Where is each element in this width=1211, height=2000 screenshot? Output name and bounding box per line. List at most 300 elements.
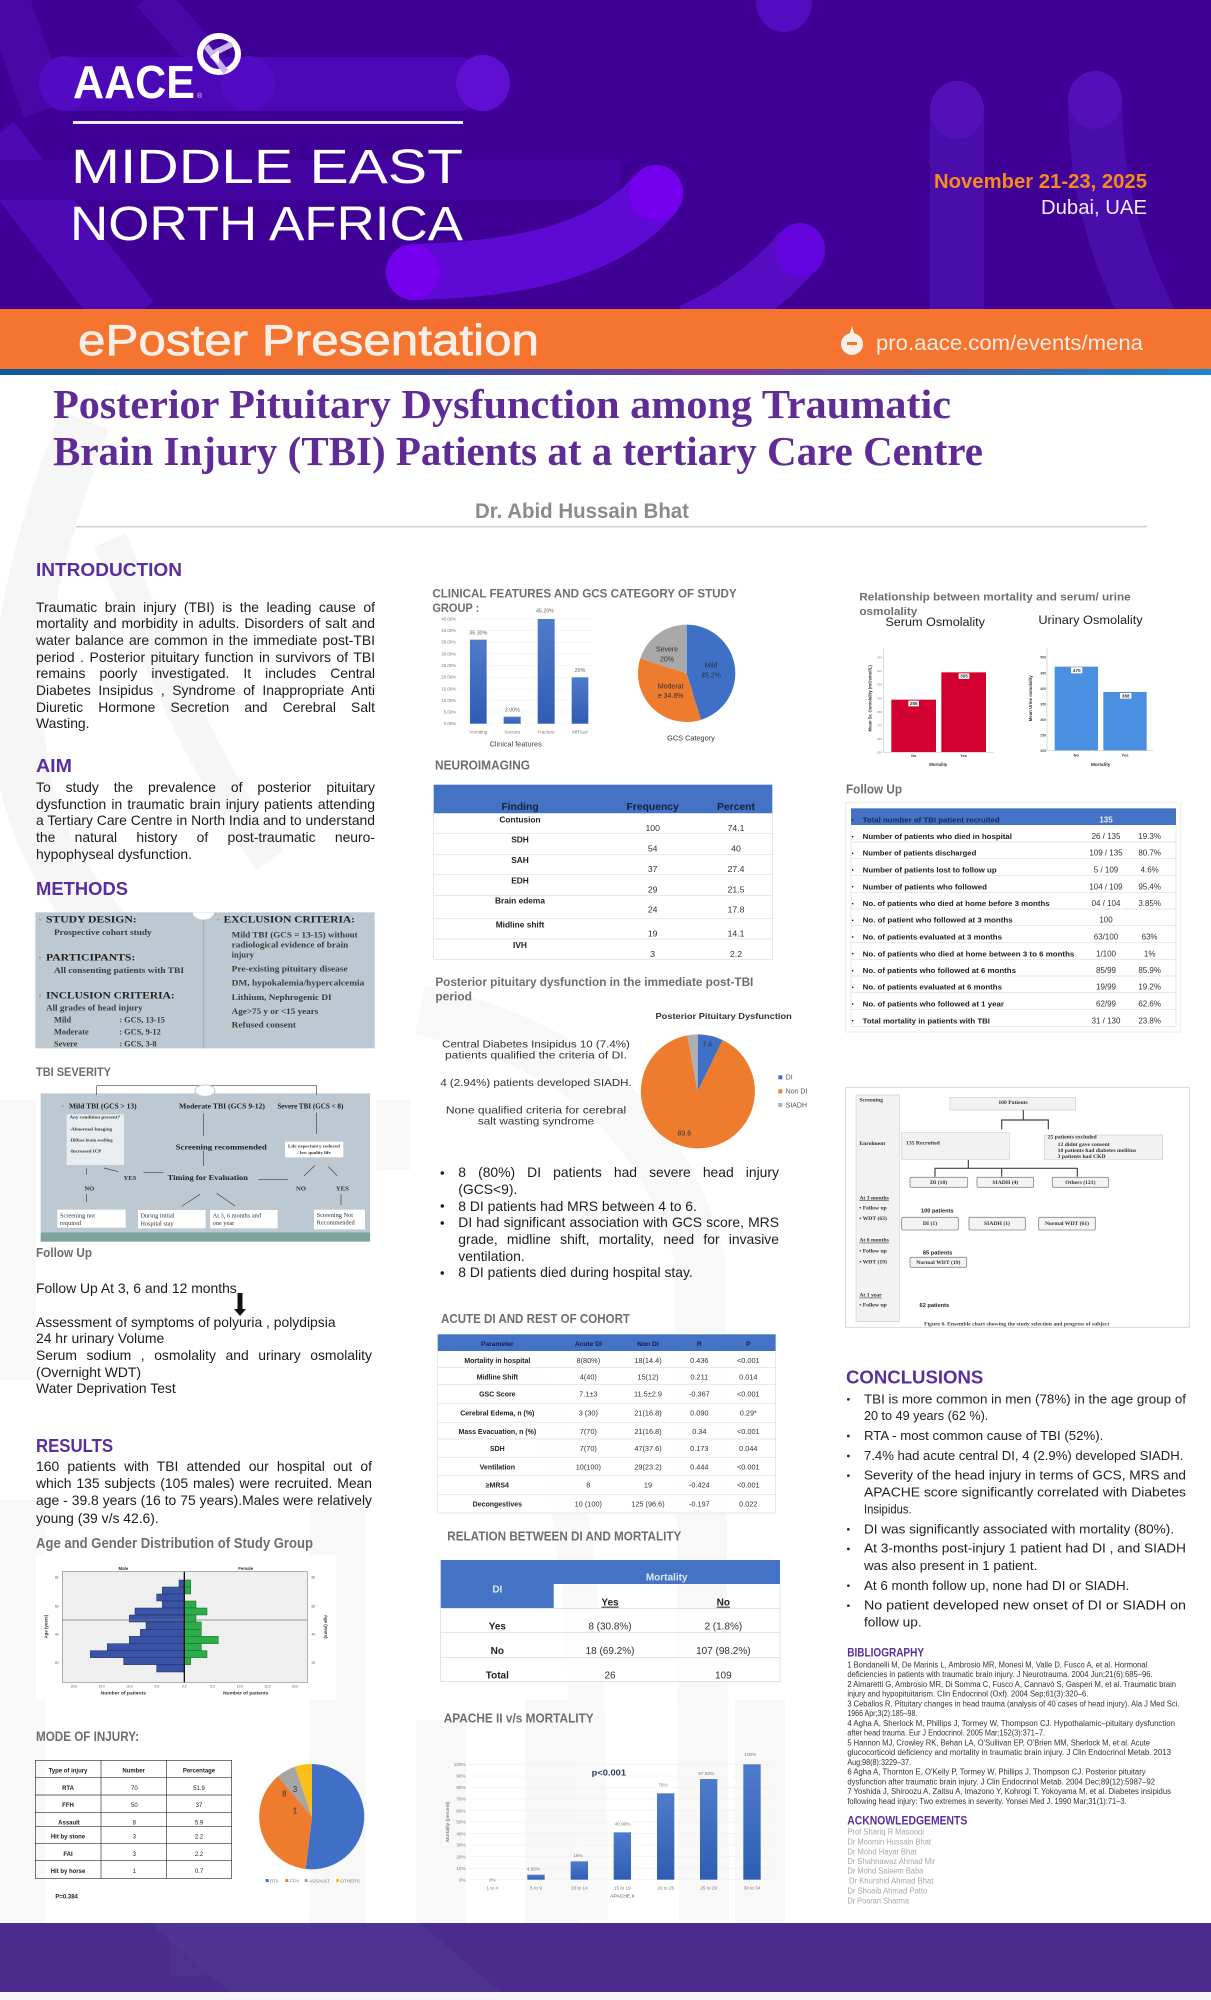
- flowchart: study selection and progress: Screening: [859, 1098, 883, 1104]
- chart: posterior pituitary dysfunction pie: DI: [786, 1075, 793, 1082]
- chart: clinical features bars: 10.00%: [441, 698, 456, 703]
- chart: serum osmolality: Mean Sr. Osmolality (mOsmol/L): [867, 665, 872, 732]
- table: relation between DI and mortality: 107 (98.2%): [696, 1646, 751, 1657]
- list: conclusions: At 3-months post-injury 1 patient had DI , and SIADH: [864, 1541, 1186, 1556]
- event name: [70, 141, 463, 251]
- table: relation between DI and mortality: Yes: [601, 1598, 619, 1609]
- list: bibliography: 7 Yoshida J, Shiroozu A, Zaitsu A, Imazono Y, Kohrogi T, Yokoyama M, et al. Diabetes insipidus: [847, 1787, 1171, 1796]
- flowchart: TBI severity screening: Severe TBI (GCS < 8): [277, 1101, 344, 1110]
- list: bibliography: dysfunction after traumatic brain injury. J Clin Endocrinol Metab. 2004 Dec;89(12):5987–92: [847, 1777, 1156, 1786]
- table: relation between DI and mortality: 2 (1.8%): [704, 1621, 742, 1632]
- table: relation between DI and mortality: Total: [486, 1671, 509, 1682]
- table: mode of injury: FFH: [62, 1803, 74, 1809]
- table: acute DI and rest of cohort: 15(12): [637, 1373, 659, 1382]
- chart: mode of injury pie: 1: [293, 1807, 298, 1816]
- table: acute DI and rest of cohort: 47(37.6): [634, 1444, 662, 1453]
- flowchart: study selection and progress: 85 patients: [923, 1251, 952, 1257]
- table: relation between DI and mortality: 8 (30.8%): [588, 1621, 632, 1632]
- list: acknowledgements: Dr Shahnawaz Ahmad Mir: [847, 1857, 936, 1866]
- text block: aim: hypophyseal dysfunction.: [36, 846, 192, 862]
- chart: GCS category pie: e 34.8%: [658, 693, 683, 700]
- table: follow up: 63/100: [1094, 933, 1119, 942]
- chart: mode of injury pie: 8: [282, 1789, 287, 1798]
- chart: posterior pituitary dysfunction pie: [641, 1011, 807, 1148]
- list: conclusions: At 6 month follow up, none had DI or SIADH.: [864, 1578, 1129, 1593]
- chart: APACHE II mortality bars: 15 to 19: [614, 1885, 631, 1890]
- table: acute DI and rest of cohort: 10(100): [576, 1462, 601, 1471]
- table: mode of injury: Assault: [58, 1820, 80, 1826]
- chart: GCS category pie: Mild: [705, 663, 718, 670]
- table: acute DI and rest of cohort: 19: [644, 1481, 652, 1490]
- chart: urinary osmolality: Yes: [1122, 752, 1129, 757]
- flowchart: study selection and progress: At 6 months: [859, 1238, 890, 1244]
- table: mode of injury: RTA: [62, 1786, 75, 1792]
- list: acknowledgements: Dr Moomin Hussain Bhat: [847, 1837, 932, 1846]
- flowchart: study selection and progress: 25 patients excluded: [1048, 1135, 1098, 1141]
- table: neuroimaging: Midline shift: [496, 920, 545, 930]
- text block: introduction: water balance are common in the immediate post-TBI: [36, 632, 375, 648]
- table: acute DI and rest of cohort: Midline Shift: [477, 1375, 519, 1382]
- chart: urinary osmolality: 450: [1040, 671, 1046, 675]
- chart: urinary osmolality: No: [1074, 752, 1080, 757]
- table: acute DI and rest of cohort: 8(80%): [577, 1356, 600, 1365]
- table: mode of injury: FAI: [63, 1852, 73, 1858]
- chart: GCS category pie: [638, 625, 735, 742]
- table: neuroimaging: Frequency: [627, 802, 679, 813]
- chart: APACHE II mortality bars: 4.50%: [527, 1867, 540, 1872]
- table: acute DI and rest of cohort: Mortality in hospital: [464, 1358, 530, 1365]
- chart: APACHE II mortality bars: [445, 1752, 773, 1900]
- heading: posterior pituitary dysfunction: Posterior pituitary dysfunction in the immediate post-TBI: [435, 976, 753, 989]
- panel: study design and criteria: [35, 912, 375, 1049]
- chart: clinical features bars: 36.30%: [469, 631, 488, 637]
- event date and place: Dubai, UAE: [1041, 197, 1147, 219]
- table: acute DI and rest of cohort: 11.5±2.9: [634, 1390, 662, 1399]
- flowchart: study selection and progress: [846, 1087, 1189, 1327]
- flowchart: study selection and progress: Normal WDT (19): [916, 1259, 960, 1266]
- table: acute DI and rest of cohort: <0.001: [737, 1356, 760, 1365]
- chart: APACHE II mortality bars: 60%: [456, 1808, 466, 1813]
- table: acute DI and rest of cohort: 0.022: [739, 1499, 758, 1508]
- heading: clinical features: CLINICAL FEATURES AND GCS CATEGORY OF STUDY: [432, 586, 737, 600]
- table: relation between DI and mortality: 18 (69.2%): [586, 1646, 634, 1657]
- flowchart: study selection and progress: Figure 6. Ensemble chart showing the study selection and progress of subject: [924, 1321, 1109, 1327]
- list: conclusions: [847, 1391, 1186, 1630]
- table: neuroimaging: 14.1: [728, 929, 745, 939]
- table: neuroimaging: 17.8: [728, 905, 745, 915]
- text block: results: which 135 subjects (105 males) were recruited. Mean: [36, 1475, 372, 1491]
- heading: relationship mortality and osmolality: Relationship between mortality and serum/ urine: [859, 592, 1131, 604]
- list: acknowledgements: Dr Mohd Hayat Bhat: [847, 1847, 917, 1856]
- heading: conclusions: CONCLUSIONS: [846, 1366, 983, 1387]
- chart: mode of injury pie: RTA: [270, 1878, 280, 1883]
- table: acute DI and rest of cohort: <0.001: [737, 1462, 760, 1471]
- table: follow up: 04 / 104: [1092, 899, 1121, 908]
- table: mode of injury: 8: [133, 1820, 137, 1826]
- chart: serum osmolality: 310: [877, 669, 882, 673]
- chart: age and gender pyramid: Male: [119, 1566, 129, 1571]
- table: acute DI and rest of cohort: 0.444: [690, 1462, 709, 1471]
- text block: dysfunction findings: 8 (80%) DI patients had severe head injury: [458, 1164, 779, 1180]
- heading: relation between DI and mortality: RELATION BETWEEN DI AND MORTALITY: [447, 1530, 682, 1544]
- table: neuroimaging: 37: [648, 864, 658, 874]
- title: [53, 381, 983, 474]
- table: follow up: No. of patients who died at home between 3 to 6 months: [863, 949, 1074, 958]
- list: conclusions: 20 to 49 years (62 %).: [864, 1408, 988, 1423]
- chart: clinical features bars: 45.00%: [441, 616, 456, 621]
- table: follow up: 95.4%: [1138, 882, 1161, 891]
- chart: APACHE II mortality bars: 30 to 34: [744, 1885, 761, 1890]
- text block: results: 160 patients with TBI attended our hospital out of: [36, 1458, 372, 1474]
- table: neuroimaging: 40: [731, 844, 741, 854]
- title: Posterior Pituitary Dysfunction among Traumatic: [53, 381, 951, 427]
- text block: dysfunction findings: DI had significant association with GCS score, MRS: [458, 1214, 779, 1230]
- text block: follow up schedule: Serum sodium , osmolality and urinary osmolality: [36, 1347, 372, 1363]
- table: neuroimaging: 24: [648, 905, 658, 915]
- chart: posterior pituitary dysfunction pie: Non DI: [786, 1089, 807, 1096]
- list: bibliography: after head trauma. Eur J Endocrinol. 2005 Mar;152(3):371–7.: [847, 1729, 1045, 1738]
- flowchart: TBI severity screening: At 3, 6 months and: [213, 1212, 262, 1219]
- table: mode of injury: Percentage: [183, 1769, 216, 1775]
- table: acute DI and rest of cohort: 0.044: [739, 1444, 758, 1453]
- flowchart: TBI severity screening: YES: [336, 1185, 349, 1192]
- flowchart: TBI severity screening: NO: [296, 1185, 306, 1192]
- chart: GCS category pie: 20%: [660, 656, 674, 663]
- event date and place: [934, 171, 1147, 219]
- table: acute DI and rest of cohort: 0.436: [690, 1356, 709, 1365]
- table: relation between DI and mortality: [441, 1560, 780, 1682]
- flowchart: TBI severity screening: Moderate TBI (GCS 9-12): [179, 1101, 266, 1110]
- chart: age and gender pyramid: Number of patients: [223, 1691, 269, 1697]
- flowchart: TBI severity screening: / low quality life: [296, 1151, 331, 1155]
- heading: results: RESULTS: [36, 1435, 113, 1456]
- table: mode of injury: 50: [131, 1803, 138, 1809]
- table: follow up: 100: [1099, 916, 1113, 925]
- table: relation between DI and mortality: Mortality: [646, 1573, 688, 1584]
- table: acute DI and rest of cohort: SDH: [490, 1446, 505, 1453]
- chart: age and gender pyramid: 20.0: [71, 1684, 77, 1688]
- panel: study design and criteria: Age>75 y or <15 years: [232, 1007, 319, 1016]
- text: dysfunction summary: None qualified criteria for cerebral: [446, 1106, 626, 1117]
- text block: follow up schedule: Follow Up At 3, 6 and 12 months: [36, 1280, 237, 1296]
- text: dysfunction summary: Central Diabetes Insipidus 10 (7.4%): [442, 1039, 630, 1050]
- chart: mode of injury pie: 3: [293, 1785, 298, 1794]
- chart: APACHE II mortality bars: 90%: [456, 1774, 466, 1779]
- list: bibliography: deficiencies in patients with traumatic brain injury. J Neurotrauma. 2004 Jun;21(6):685–96.: [847, 1670, 1153, 1679]
- table: acute DI and rest of cohort: 0.090: [690, 1408, 709, 1417]
- chart: APACHE II mortality bars: 50%: [456, 1820, 466, 1825]
- table: acute DI and rest of cohort: <0.001: [737, 1481, 760, 1490]
- flowchart: study selection and progress: SIADH (1): [984, 1220, 1010, 1227]
- list: acknowledgements: Dr Pooran Sharma: [847, 1896, 910, 1905]
- panel: study design and criteria: Refused consent: [232, 1021, 296, 1030]
- table: mode of injury: P=0.384: [55, 1894, 79, 1900]
- heading: acknowledgements: ACKNOWLEDGEMENTS: [847, 1815, 968, 1827]
- chart: mode of injury pie: FFH: [290, 1878, 299, 1883]
- heading: clinical features: [432, 586, 737, 615]
- event name: MIDDLE EAST: [71, 141, 463, 194]
- chart: APACHE II mortality bars: 10%: [456, 1866, 466, 1871]
- table: neuroimaging: Percent: [717, 802, 756, 813]
- flowchart: study selection and progress: • Follow up: [859, 1303, 887, 1309]
- text block: results: [36, 1458, 372, 1526]
- chart: mode of injury pie: OTHERS: [340, 1878, 360, 1883]
- table: mode of injury: 70: [131, 1786, 138, 1792]
- flowchart: study selection and progress: Normal WDT (61): [1045, 1220, 1089, 1227]
- table: acute DI and rest of cohort: Parameter: [481, 1341, 514, 1348]
- table: follow up: 31 / 130: [1092, 1016, 1121, 1025]
- table: mode of injury: 5.9: [195, 1820, 204, 1826]
- chart: clinical features bars: 20.00%: [441, 675, 456, 680]
- chart: serum osmolality: [867, 615, 993, 767]
- panel: study design and criteria: Mild: [54, 1016, 71, 1025]
- heading: clinical features: GROUP :: [432, 601, 479, 615]
- chart: serum osmolality: 305: [960, 674, 968, 679]
- chart: APACHE II mortality bars: APACHE II: [610, 1894, 634, 1900]
- chart: urinary osmolality: 300: [1040, 718, 1046, 722]
- table: neuroimaging: EDH: [511, 875, 529, 885]
- flowchart: study selection and progress: 12 didnt gave consent: [1058, 1142, 1110, 1148]
- table: acute DI and rest of cohort: 125 (96.6): [631, 1499, 665, 1508]
- table: follow up: 63%: [1142, 933, 1158, 942]
- table: mode of injury: Number: [122, 1769, 146, 1775]
- chart: APACHE II mortality bars: 1 to 4: [487, 1885, 499, 1890]
- bullets: dysfunction findings markers: [440, 1171, 444, 1275]
- list: bibliography: 5 Hannon MJ, Crowley RK, Behan LA, O'Sullivan EP, O'Brien MM, Sherlock M, et al. Acute: [847, 1738, 1151, 1747]
- chart: APACHE II mortality bars: 25 to 29: [700, 1885, 717, 1890]
- chart: clinical features bars: 20%: [575, 668, 586, 674]
- list: conclusions: No patient developed new onset of DI or SIADH on: [864, 1597, 1186, 1612]
- chart: serum osmolality: 290: [877, 696, 882, 700]
- chart: urinary osmolality: 350: [1040, 702, 1046, 706]
- table: mode of injury: Hit by stone: [51, 1835, 86, 1841]
- heading: aim: AIM: [36, 755, 72, 776]
- chart: clinical features bars: MRS≥4: [572, 729, 588, 734]
- chart: serum osmolality: Mortality: [929, 762, 948, 767]
- table: follow up: 26 / 135: [1092, 832, 1121, 841]
- heading: relationship mortality and osmolality: [859, 592, 1131, 618]
- chart: serum osmolality: 300: [877, 683, 882, 687]
- divider rule in logo block: [73, 121, 463, 124]
- table: follow up: 62/99: [1096, 1000, 1117, 1009]
- text: dysfunction summary: patients qualified the criteria of DI.: [445, 1050, 627, 1061]
- table: neuroimaging: Finding: [501, 802, 539, 813]
- table: follow up: Number of patients lost to follow up: [863, 866, 997, 875]
- panel: study design and criteria: STUDY DESIGN:: [46, 914, 137, 924]
- flowchart: TBI severity screening: Screening not: [60, 1212, 95, 1219]
- flowchart: study selection and progress: • Follow up: [859, 1249, 887, 1255]
- chart: serum osmolality: 320: [877, 655, 882, 659]
- panel: study design and criteria: : GCS, 9-12: [119, 1028, 161, 1037]
- chart: urinary osmolality: 500: [1040, 656, 1046, 660]
- table: neuroimaging: 29: [648, 884, 658, 894]
- table: acute DI and rest of cohort: 29(23.2): [634, 1462, 662, 1471]
- flowchart: study selection and progress: DI (1): [923, 1220, 937, 1227]
- text block: introduction: period . Posterior pituitary function in survivors of TBI: [36, 649, 375, 665]
- text block: dysfunction findings: 8 DI patients had MRS between 4 to 6.: [458, 1198, 697, 1214]
- table: acute DI and rest of cohort: ≥MRS4: [486, 1483, 509, 1490]
- flowchart: study selection and progress: • WDT (19): [859, 1258, 887, 1265]
- table: neuroimaging: 100: [645, 823, 660, 833]
- flowchart: TBI severity screening: Screening Not: [317, 1212, 353, 1219]
- flowchart: TBI severity screening: During initial: [140, 1213, 175, 1220]
- table: acute DI and rest of cohort: Acute DI: [575, 1341, 602, 1348]
- table: acute DI and rest of cohort: 0.29*: [740, 1408, 757, 1417]
- table: follow up: 1%: [1144, 949, 1155, 958]
- chart: age and gender pyramid: Number of patients: [101, 1691, 146, 1697]
- author: Dr. Abid Hussain Bhat: [475, 500, 689, 523]
- table: follow up: [846, 803, 1181, 1032]
- table: acute DI and rest of cohort: 3 (30): [579, 1408, 598, 1417]
- text block: results: age - 39.8 years (16 to 75 years).Males were relatively: [36, 1492, 372, 1508]
- list: bibliography: 1966 Apr;3(2):185–98.: [847, 1709, 917, 1718]
- chart: serum osmolality: 250: [877, 751, 882, 755]
- table: mode of injury: 0.7: [195, 1869, 204, 1875]
- table: acute DI and rest of cohort: 10 (100): [575, 1499, 602, 1508]
- list: conclusions: DI was significantly associated with mortality (80%).: [864, 1521, 1174, 1536]
- heading: neuroimaging: NEUROIMAGING: [435, 758, 530, 772]
- heading: follow up (methods): Follow Up: [36, 1245, 92, 1260]
- flowchart: TBI severity screening: Timing for Evaluation: [168, 1173, 248, 1182]
- chart: clinical features bars: 15.00%: [441, 686, 456, 691]
- table: neuroimaging: Contusion: [499, 814, 541, 824]
- chart: clinical features bars: 40.00%: [441, 628, 456, 633]
- flowchart: TBI severity screening: NO: [84, 1185, 94, 1192]
- table: mode of injury: 3: [133, 1835, 137, 1841]
- chart: serum osmolality: 280: [877, 710, 882, 714]
- chart: urinary osmolality: Mean Urine osmolality: [1028, 675, 1033, 721]
- chart: age and gender pyramid: 40: [311, 1633, 315, 1637]
- table: follow up: Number of patients who followed: [863, 882, 987, 891]
- chart: clinical features bars: Vomiting: [469, 729, 488, 734]
- chart: APACHE II mortality bars: 40.90%: [615, 1822, 631, 1827]
- heading: relationship mortality and osmolality: osmolality: [859, 606, 918, 618]
- table: relation between DI and mortality: No: [491, 1646, 504, 1657]
- chart: age and gender pyramid: Female: [238, 1566, 254, 1571]
- text block: follow up schedule: Assessment of symptoms of polyuria , polydipsia: [36, 1314, 336, 1330]
- list: acknowledgements: Dr Shoaib Ahmad Patto: [847, 1886, 928, 1895]
- table: follow up: 5 / 109: [1094, 866, 1119, 875]
- chart: posterior pituitary dysfunction pie: SIADH: [786, 1102, 807, 1109]
- chart: clinical features bars: [441, 608, 593, 748]
- table: follow up: Number of patients discharged: [863, 849, 977, 858]
- heading: methods: METHODS: [36, 878, 128, 899]
- list: conclusions: APACHE score significantly correlated with Diabetes: [864, 1485, 1186, 1500]
- chart: clinical features bars: Clinical features: [490, 739, 542, 748]
- text block: dysfunction findings: (GCS<9).: [458, 1181, 517, 1197]
- list: conclusions: was also present in 1 patient.: [863, 1558, 1037, 1573]
- chart: age and gender pyramid: 5.0: [155, 1684, 159, 1688]
- flowchart: study selection and progress: 160 Patients: [998, 1100, 1029, 1106]
- list: bibliography: glucocorticoid deficiency and mortality in traumatic brain injury. J Clin Endocrinol Metab. 2013: [847, 1748, 1172, 1757]
- flowchart: TBI severity screening: Life expectancy reduced: [288, 1145, 340, 1149]
- flowchart: study selection and progress: 62 patients: [920, 1303, 949, 1309]
- text block: aim: dysfunction in traumatic brain injury patients attending: [36, 796, 375, 812]
- flowchart: TBI severity screening: Any condition present?: [69, 1115, 120, 1119]
- heading: APACHE II vs mortality: APACHE II v/s MORTALITY: [444, 1711, 594, 1725]
- chart: age and gender pyramid: 15.0: [264, 1684, 271, 1688]
- list: acknowledgements: [847, 1828, 936, 1905]
- chart: age and gender pyramid: 60: [311, 1604, 315, 1608]
- chart: serum osmolality: Serum Osmolality: [885, 615, 986, 629]
- heading: introduction: INTRODUCTION: [36, 559, 182, 580]
- table: mode of injury: 2.2: [195, 1852, 204, 1858]
- chart: age and gender pyramid: 10.0: [126, 1684, 133, 1688]
- list: acknowledgements: Prof Shariq R Masoodi: [847, 1828, 924, 1837]
- table: follow up: No. of patients evaluated at 6 months: [863, 983, 1002, 992]
- chart: urinary osmolality: Mortality: [1091, 762, 1111, 767]
- table: acute DI and rest of cohort: 0.34: [692, 1427, 706, 1436]
- panel: study design and criteria: DM, hypokalemia/hypercalcemia: [232, 979, 365, 988]
- list: conclusions: Severity of the head injury in terms of GCS, MRS and: [864, 1467, 1186, 1482]
- flowchart: study selection and progress: • WDT (63): [859, 1215, 887, 1222]
- table: follow up: 1/100: [1096, 949, 1117, 958]
- list: bibliography: 1 Bondanelli M, De Marinis L, Ambrosio MR, Monesi M, Valle D, Fusco A, et al. Hormonal: [847, 1660, 1148, 1669]
- text block: follow up schedule: (Overnight WDT): [36, 1364, 141, 1380]
- flowchart: study selection and progress: SIADH (4): [992, 1179, 1018, 1186]
- event name: NORTH AFRICA: [70, 198, 463, 251]
- table: acute DI and rest of cohort: GSC Score: [479, 1392, 516, 1399]
- flowchart: study selection and progress: Enrolment: [859, 1141, 885, 1147]
- panel: study design and criteria: : GCS, 3-8: [119, 1040, 157, 1049]
- chart: age and gender pyramid: 20.0: [292, 1684, 298, 1688]
- table: acute DI and rest of cohort: 4(40): [580, 1373, 597, 1382]
- flowchart: TBI severity screening: one year: [213, 1220, 235, 1227]
- list: bibliography: 4 Agha A, Sherlock M, Phillips J, Tormey W, Thompson CJ. Hypothalamic–pituitary dysfunction: [847, 1719, 1175, 1728]
- flowchart: TBI severity screening: Hospital stay: [140, 1220, 174, 1227]
- panel: study design and criteria: All consenting patients with TBI: [54, 966, 184, 975]
- table: neuroimaging: SAH: [511, 855, 529, 865]
- table: acute DI and rest of cohort: 21(16.8): [634, 1427, 662, 1436]
- table: neuroimaging: IVH: [513, 940, 527, 950]
- chart: urinary osmolality: Urinary Osmolality: [1038, 613, 1144, 627]
- chart: clinical features bars: 30.00%: [441, 651, 456, 656]
- orange ePoster band: [0, 309, 1211, 375]
- chart: age and gender pyramid: 80: [55, 1576, 59, 1580]
- chart: urinary osmolality: 388: [1122, 694, 1130, 699]
- chart: APACHE II mortality bars: 80%: [456, 1785, 466, 1790]
- chart: APACHE II mortality bars: 40%: [456, 1831, 466, 1836]
- table: acute DI and rest of cohort: 8: [586, 1481, 590, 1490]
- logo: AACE: [73, 36, 238, 108]
- text block: follow up schedule: [36, 1280, 372, 1396]
- flowchart: TBI severity screening: -Increased ICP: [69, 1149, 102, 1153]
- table: follow up: 80.7%: [1138, 849, 1161, 858]
- flowchart: study selection and progress: 10 patients had diabetes mellitus: [1058, 1148, 1137, 1154]
- flowchart: TBI severity screening: [41, 1085, 370, 1242]
- list: conclusions: follow up.: [864, 1615, 922, 1630]
- text: dysfunction summary: salt wasting syndrome: [478, 1117, 594, 1128]
- chart: age and gender pyramid: 5.0: [210, 1684, 215, 1688]
- table: acute DI and rest of cohort: -0.424: [689, 1481, 710, 1490]
- event date and place: November 21-23, 2025: [934, 171, 1147, 193]
- chart: APACHE II mortality bars: Mortality (percent): [445, 1801, 451, 1842]
- table: follow up: No. of patient who followed at 3 months: [863, 916, 1013, 925]
- table: follow up: No. of patients who followed at 1 year: [863, 1000, 1004, 1009]
- text: dysfunction summary: 4 (2.94%) patients developed SIADH.: [440, 1078, 632, 1089]
- list: conclusions: RTA - most common cause of TBI (52%).: [864, 1428, 1103, 1443]
- list: bibliography: injury and hypopituitarism. Clin Endocrinol (Oxf). 2004 Sep;61(3):320–6.: [847, 1690, 1088, 1699]
- table: mode of injury: 1: [133, 1869, 137, 1875]
- text block: introduction: Diabetes Insipidus , Syndrome of Inappropriate Anti: [36, 682, 375, 698]
- chart: urinary osmolality: 250: [1040, 734, 1046, 738]
- heading: posterior pituitary dysfunction: [435, 976, 753, 1004]
- table: follow up: No. of patients who died at home before 3 months: [863, 899, 1050, 908]
- table: follow up: 19.2%: [1138, 983, 1161, 992]
- table: follow up: Total mortality in patients with TBI: [863, 1016, 990, 1025]
- logo: AACE: ®: [197, 92, 203, 100]
- text block: dysfunction findings: ventilation.: [458, 1248, 525, 1264]
